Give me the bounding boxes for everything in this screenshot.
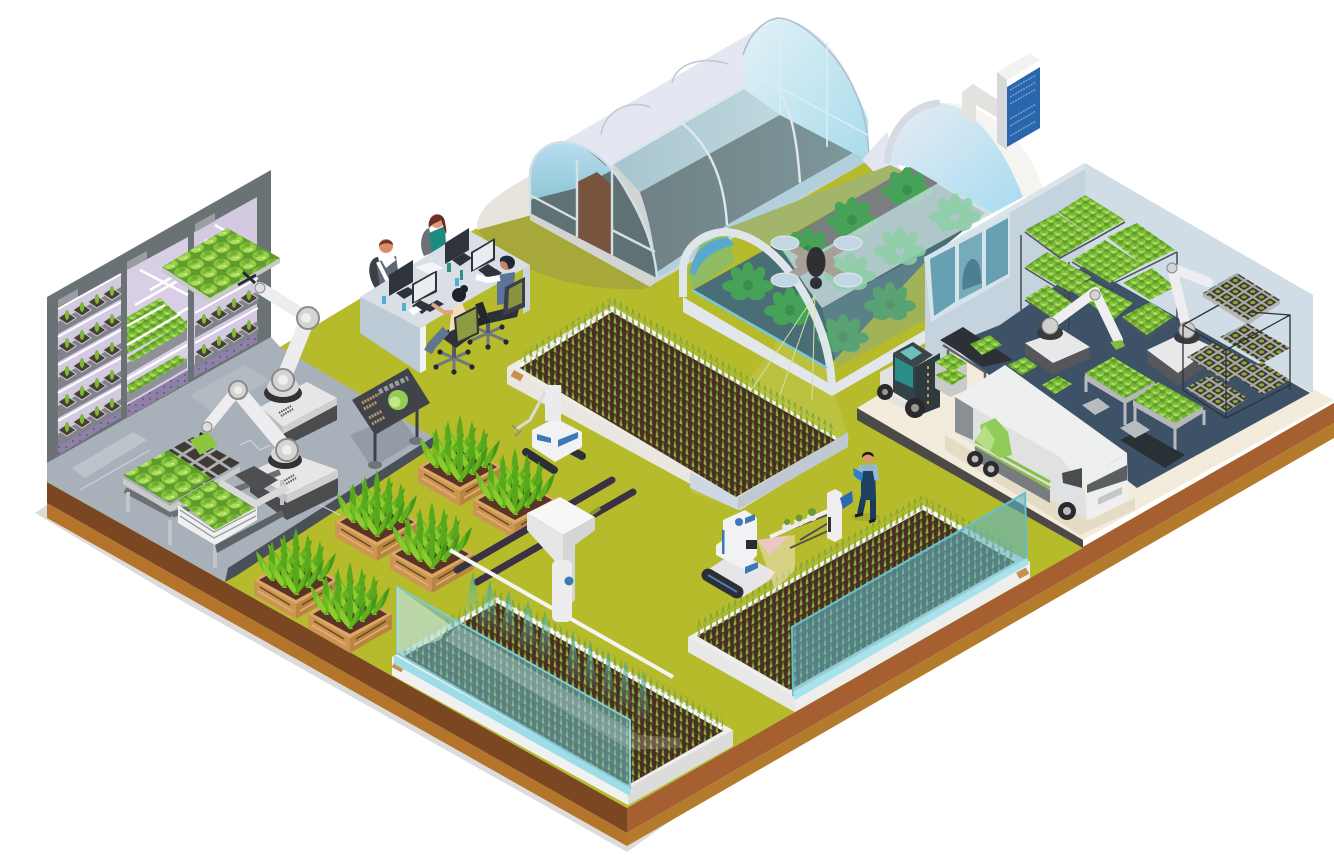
sprinkler gantry xyxy=(450,480,673,722)
far end glass xyxy=(743,18,869,160)
platform xyxy=(857,270,1334,540)
room robot arm: right xyxy=(1147,263,1213,386)
desk xyxy=(360,230,530,373)
delivery truck xyxy=(945,365,1135,535)
raised lettuce tray xyxy=(162,228,280,303)
rear lavender roof tail xyxy=(862,132,900,178)
base wall xyxy=(683,297,925,396)
monitors xyxy=(382,228,502,315)
ground shadow xyxy=(35,505,700,852)
lettuce shelves: middle bay xyxy=(127,298,187,403)
seedling racks: right bay xyxy=(195,278,258,368)
window xyxy=(924,213,1010,322)
drone xyxy=(750,236,862,400)
person and chair: right man xyxy=(467,256,525,350)
seedling racks: left bay xyxy=(58,274,121,446)
inspection robot on tracks xyxy=(703,510,795,597)
greenhouse 2 with lettuce beds xyxy=(683,103,1045,396)
plants xyxy=(722,167,933,352)
panel: vertical farm back wall xyxy=(47,170,271,463)
greenhouse shadows on grass xyxy=(477,215,850,510)
chair and person: woman at back xyxy=(421,214,446,256)
packing tables with lettuce xyxy=(1082,357,1204,468)
robot arm: upper xyxy=(238,272,337,447)
corn crates xyxy=(254,415,557,653)
rice bed: upper xyxy=(507,297,848,510)
floor xyxy=(693,167,985,368)
rice bed: lower right xyxy=(688,495,1030,712)
spray nozzles xyxy=(462,572,651,722)
seedling trays and frame xyxy=(1183,273,1290,418)
conveyor with lettuce tray and crate xyxy=(123,432,290,568)
conveyor near truck with lettuce boxes xyxy=(940,327,1072,394)
panel: office desk with staff xyxy=(360,214,530,375)
harvesting robot on tracks: upper xyxy=(512,385,582,470)
dark floor xyxy=(950,265,1310,488)
lettuce shelving in room xyxy=(1021,195,1177,337)
greenhouse 1 xyxy=(477,18,869,287)
technician with clipboard xyxy=(852,452,880,522)
panel: packing room xyxy=(857,163,1334,548)
base: soil layers xyxy=(47,403,1334,846)
glass panel: lower right bed xyxy=(792,493,1029,700)
cooling unit with blue display xyxy=(962,53,1040,150)
glass panel: lower left bed xyxy=(394,587,680,796)
far arch glass xyxy=(887,103,1023,213)
panel: vertical farm floor xyxy=(47,337,433,582)
front arch xyxy=(683,232,832,393)
walls xyxy=(925,163,1085,372)
room robot arm: left xyxy=(1025,290,1125,375)
seedling transplant post xyxy=(770,489,853,548)
roof glass band xyxy=(780,183,993,308)
front end xyxy=(530,142,657,278)
rice bed: lower left xyxy=(392,589,733,805)
chair and person: man at left xyxy=(369,239,399,288)
ribs xyxy=(601,61,728,135)
person and chair: front woman xyxy=(428,285,478,375)
robot arm: lower xyxy=(197,381,338,520)
forklift xyxy=(877,342,967,418)
green field surface xyxy=(47,160,1083,808)
info sign board xyxy=(352,368,430,469)
